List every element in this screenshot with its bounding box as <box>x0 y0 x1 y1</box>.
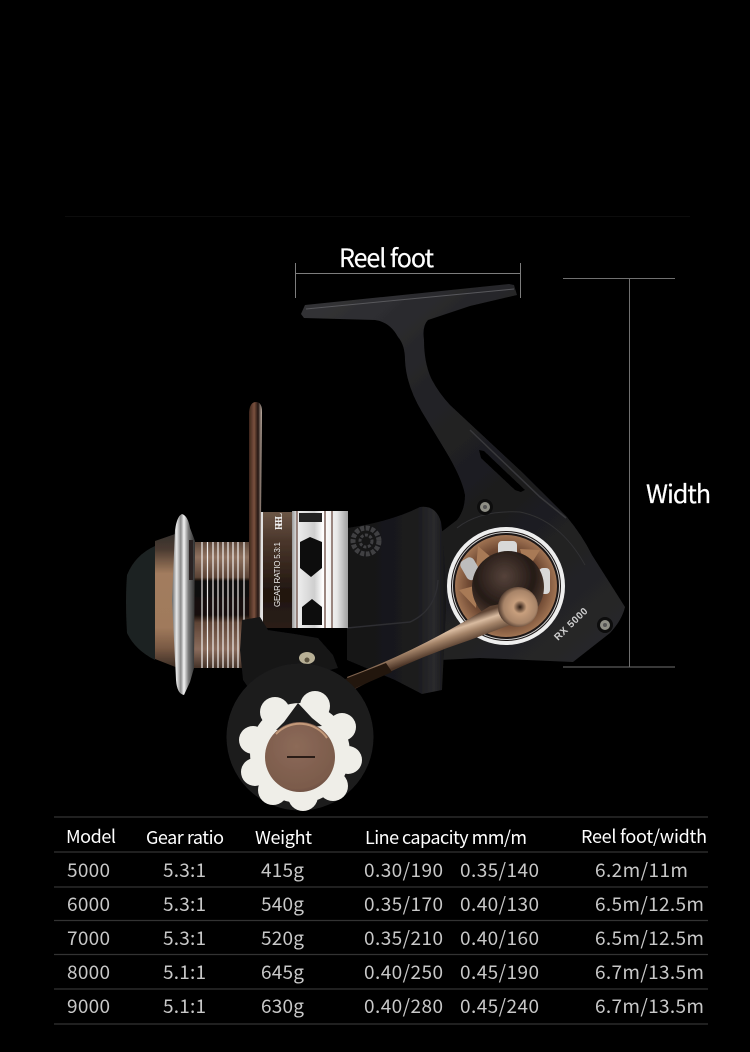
label: width dimension: Width <box>646 475 711 511</box>
row 9000: 9000 <box>67 992 110 1019</box>
model badge: RX 5000 <box>552 606 591 643</box>
reel stand and gearbox frame <box>301 284 625 662</box>
row 8000 <box>67 958 704 985</box>
specifications table <box>54 817 708 1024</box>
gearbox dial <box>447 527 565 645</box>
knob flower <box>239 691 362 811</box>
row 7000: 520g <box>261 924 304 951</box>
knob cap <box>265 722 335 792</box>
row 9000: 0.45/240 <box>460 992 539 1019</box>
row 5000: 415g <box>261 856 304 883</box>
row 6000: 5.3:1 <box>163 890 206 917</box>
frame screws <box>477 499 493 515</box>
spool bronze cone <box>155 533 178 668</box>
table header: Line capacity mm/m <box>365 824 527 850</box>
row 8000: 5.1:1 <box>163 958 206 985</box>
spool front cap <box>126 546 155 660</box>
label: reel foot dimension: Reel foot <box>339 239 435 275</box>
row 9000: 630g <box>261 992 304 1019</box>
row 7000: 0.40/160 <box>460 924 539 951</box>
row 8000: 0.40/250 <box>364 958 443 985</box>
ring cutouts <box>300 537 322 577</box>
line roller collar <box>258 512 293 628</box>
row 8000: 8000 <box>67 958 110 985</box>
gear spokes <box>459 546 540 608</box>
spool flange <box>172 514 195 695</box>
silver ring <box>292 511 348 628</box>
table header: Weight <box>255 824 312 850</box>
row 6000 <box>67 890 704 917</box>
table header <box>66 823 707 850</box>
row 6000: 0.35/170 <box>364 890 443 917</box>
table header: Model <box>66 823 116 849</box>
rotor emblem <box>353 528 379 554</box>
row 9000: 5.1:1 <box>163 992 206 1019</box>
row 6000: 0.40/130 <box>460 890 539 917</box>
handle knob <box>226 664 374 810</box>
rotor body <box>347 507 446 694</box>
row 7000 <box>67 924 704 951</box>
row 7000: 5.3:1 <box>163 924 206 951</box>
row 8000: 0.45/190 <box>460 958 539 985</box>
gear hub <box>472 551 544 623</box>
spool cylinder with stripes <box>192 542 250 668</box>
row 5000 <box>67 856 688 883</box>
frame window <box>479 450 525 492</box>
row 7000: 6.5m/12.5m <box>595 924 704 951</box>
row 6000: 540g <box>261 890 304 917</box>
bail arm <box>249 402 262 625</box>
table header: Reel foot/width <box>581 823 707 849</box>
mount screw <box>299 652 315 664</box>
row 5000: 0.30/190 <box>364 856 443 883</box>
row 5000: 5.3:1 <box>163 856 206 883</box>
row 8000: 645g <box>261 958 304 985</box>
row 9000: 6.7m/13.5m <box>595 992 704 1019</box>
row 5000: 5000 <box>67 856 110 883</box>
label: width dimension <box>563 278 711 667</box>
bail arm mount <box>240 617 338 690</box>
collar lettering: GEAR RATIO 5.3:1 <box>273 541 282 607</box>
row 9000 <box>67 992 704 1019</box>
label: reel foot dimension <box>296 239 520 298</box>
row 6000: 6.5m/12.5m <box>595 890 704 917</box>
table header: Gear ratio <box>146 824 224 850</box>
illustration: spinning fishing reel <box>126 284 625 811</box>
row 5000: 0.35/140 <box>460 856 539 883</box>
row 7000: 0.35/210 <box>364 924 443 951</box>
row 7000: 7000 <box>67 924 110 951</box>
illustration: spinning fishing reel: REEL <box>274 513 285 530</box>
row 9000: 0.40/280 <box>364 992 443 1019</box>
row 8000: 6.7m/13.5m <box>595 958 704 985</box>
crank ball <box>498 587 538 627</box>
row 6000: 6000 <box>67 890 110 917</box>
crank arm <box>347 604 510 690</box>
row 5000: 6.2m/11m <box>595 856 688 883</box>
